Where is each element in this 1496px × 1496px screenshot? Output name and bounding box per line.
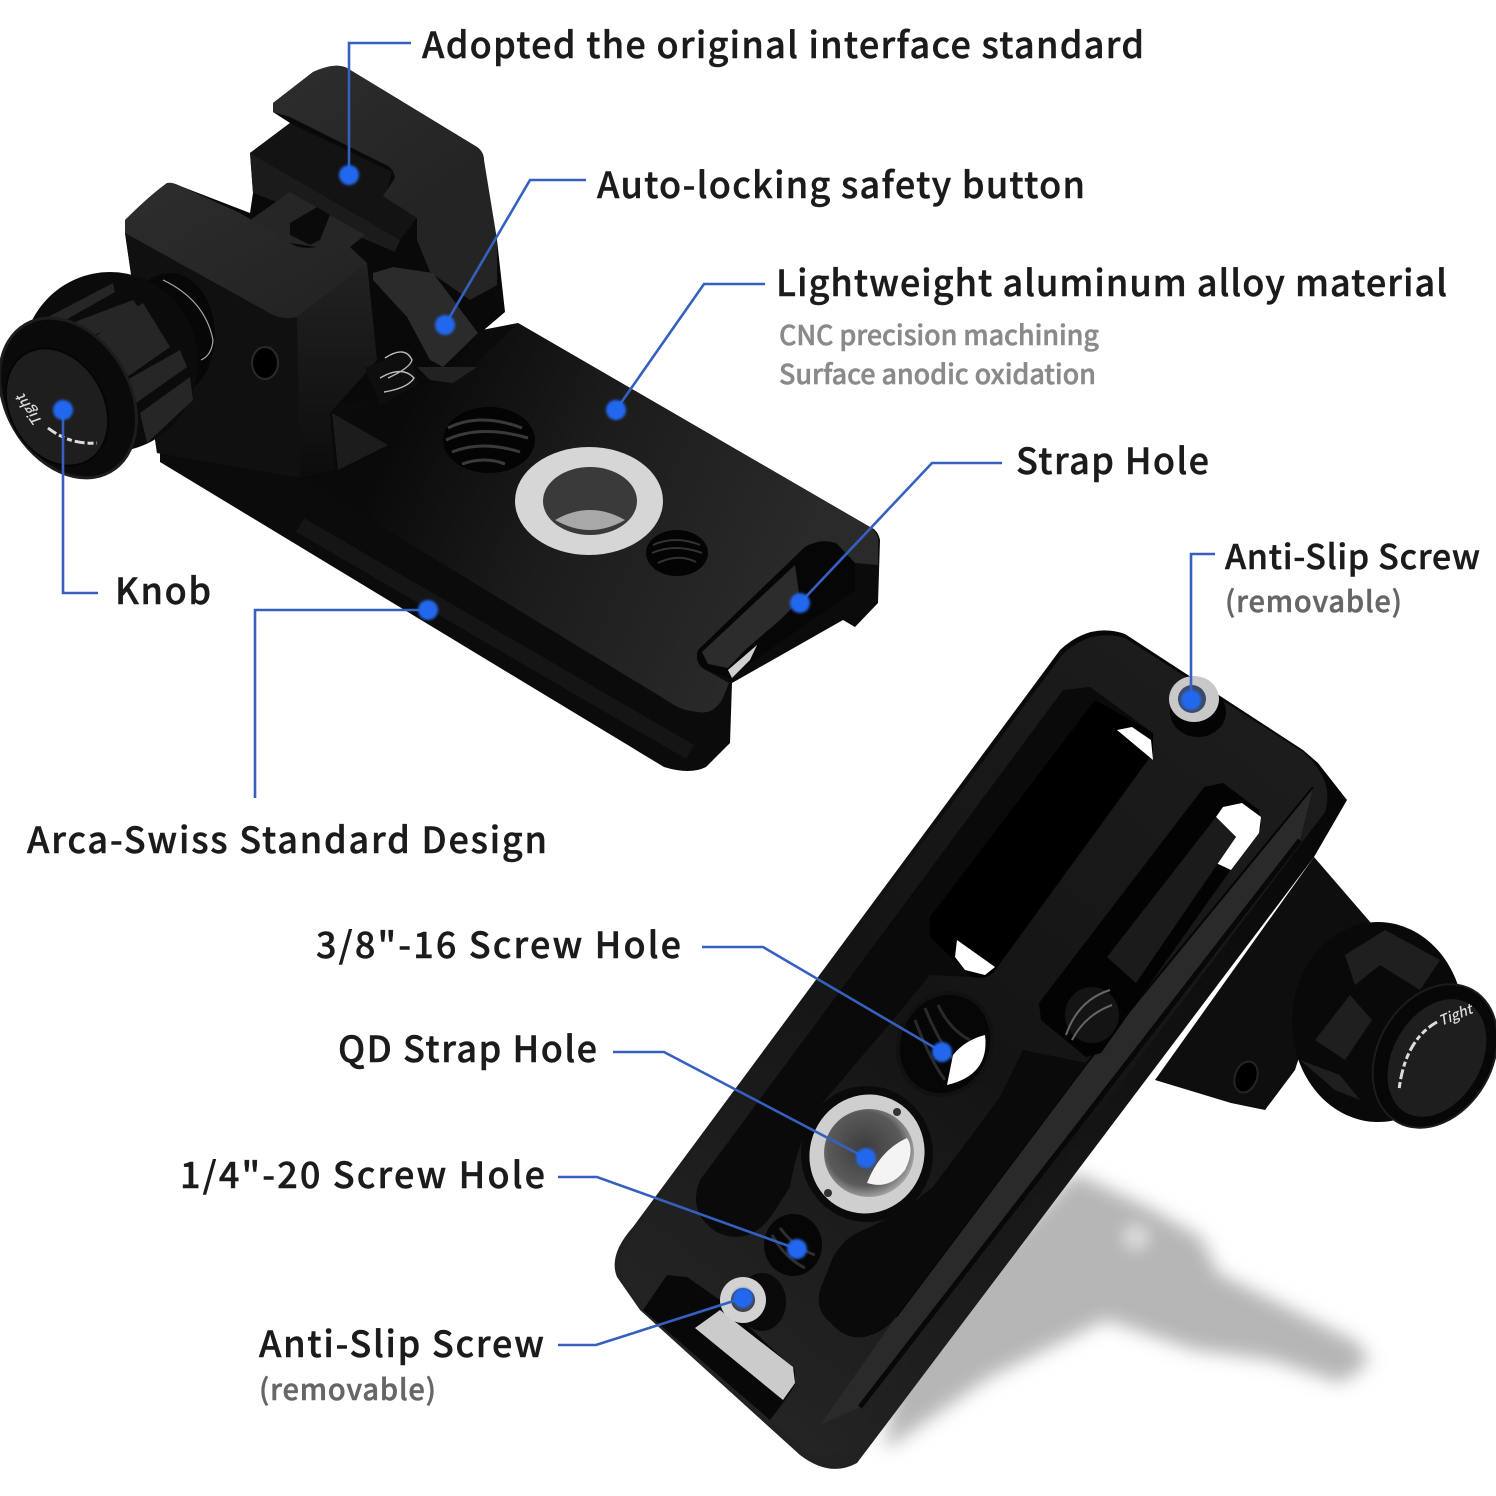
leader line	[702, 947, 942, 1052]
label: QD Strap Hole	[338, 1021, 597, 1073]
lock mechanism	[250, 192, 365, 247]
marker	[339, 165, 359, 185]
plate outer	[615, 630, 1347, 1469]
marker	[53, 400, 73, 420]
large through slot	[930, 700, 1153, 978]
wedge	[332, 413, 388, 470]
band dark line	[860, 840, 1300, 1407]
cutout bottom	[955, 940, 995, 975]
cap ring	[0, 293, 164, 503]
top product: quick release clamp plate	[0, 66, 880, 771]
knurled body	[1292, 922, 1464, 1122]
callout: interface standard	[339, 17, 1144, 185]
leader line	[445, 180, 586, 325]
marker	[435, 315, 455, 335]
label: Adopted the original interface standard	[422, 17, 1144, 69]
leader line	[558, 1177, 797, 1249]
bottom product: plate underside	[615, 630, 1496, 1469]
label: Strap Hole	[1016, 433, 1209, 485]
callout: anti-slip screw lower	[259, 1288, 753, 1409]
callout: strap hole	[790, 433, 1209, 613]
label: Anti-Slip Screw	[259, 1316, 544, 1368]
upper jaw top	[273, 66, 484, 218]
cap face	[1367, 981, 1496, 1135]
sub label: (removable)	[1225, 579, 1402, 621]
knob neck	[125, 273, 215, 397]
label: 1/4"-20 Screw Hole	[180, 1147, 545, 1199]
shelf front	[250, 153, 400, 252]
marker	[418, 600, 438, 620]
right slot cutout	[1216, 803, 1261, 870]
callout: aluminum alloy	[606, 255, 1447, 420]
anti-slip screw upper	[1169, 676, 1226, 737]
tight label: Tight	[1435, 998, 1478, 1031]
rear body	[1155, 857, 1371, 1110]
sub label 1: CNC precision machining	[779, 314, 1099, 353]
leader line	[63, 410, 98, 593]
leader line	[558, 1298, 743, 1345]
plate face	[620, 635, 1327, 1456]
callout: 1/4 screw hole	[180, 1147, 807, 1259]
shelf top	[250, 123, 417, 240]
label: Lightweight aluminum alloy material	[776, 255, 1447, 307]
mount hole	[1230, 1058, 1262, 1096]
cutout top	[1117, 727, 1153, 760]
cap ring	[1348, 962, 1496, 1150]
callout: arca-swiss	[27, 600, 547, 864]
label: Knob	[115, 563, 211, 615]
marker	[787, 1239, 807, 1259]
leader line	[349, 43, 411, 175]
side screw hole	[252, 347, 278, 379]
screw hole 1/4	[646, 530, 708, 576]
screw hole 3/8	[443, 407, 535, 473]
direction arrow	[48, 428, 97, 443]
marker	[1181, 690, 1201, 710]
sub label: (removable)	[259, 1367, 436, 1409]
label: Anti-Slip Screw	[1225, 530, 1480, 579]
leader line	[1191, 554, 1215, 700]
left front face	[125, 233, 300, 478]
marker	[932, 1042, 952, 1062]
inner screw	[1065, 987, 1119, 1043]
lower right recess	[819, 1050, 1087, 1337]
leader line	[800, 463, 1002, 603]
tight label: Tight	[10, 388, 47, 430]
1/4 screw hole	[764, 1214, 822, 1276]
knob	[0, 272, 215, 503]
knob	[1292, 922, 1496, 1150]
cap face	[0, 330, 129, 484]
knurl ridges	[48, 283, 193, 443]
leader line	[255, 610, 428, 798]
callout: 3/8 screw hole	[316, 917, 952, 1062]
strap slot	[697, 541, 855, 678]
label: Auto-locking safety button	[597, 157, 1085, 209]
label: 3/8"-16 Screw Hole	[316, 917, 681, 969]
inner block	[1107, 817, 1236, 983]
marker	[606, 400, 626, 420]
knurl ridges	[1300, 930, 1440, 1100]
3/8 screw hole	[881, 977, 1009, 1111]
callout: anti-slip screw upper	[1181, 530, 1480, 710]
callout: knob	[53, 400, 211, 615]
neck highlight	[163, 280, 213, 360]
callout: safety button	[435, 157, 1085, 335]
silver washer	[515, 447, 663, 555]
QD socket	[790, 1076, 944, 1232]
spring	[365, 350, 418, 405]
clamp silhouette	[125, 66, 505, 480]
label: Arca-Swiss Standard Design	[27, 812, 547, 864]
safety button	[373, 267, 478, 367]
direction arrow	[1399, 1022, 1437, 1090]
marker	[856, 1148, 876, 1168]
right front face	[293, 263, 377, 478]
strap notch	[643, 1275, 795, 1420]
callout: QD strap hole	[338, 1021, 876, 1168]
anti-slip screw lower	[720, 1273, 786, 1331]
step line	[896, 787, 1313, 1317]
under button piece	[417, 367, 477, 383]
marker	[790, 593, 810, 613]
plate body	[160, 323, 880, 771]
left jaw top	[125, 183, 367, 318]
lit edge band	[820, 787, 1313, 1425]
sub label 2: Surface anodic oxidation	[779, 353, 1096, 392]
strap silver insert	[695, 1310, 795, 1400]
knurled body	[22, 272, 198, 452]
leader line	[616, 284, 765, 410]
right block side face	[417, 160, 497, 300]
marker	[733, 1288, 753, 1308]
plate top face	[300, 323, 878, 712]
left recess	[696, 687, 1153, 1237]
slider	[290, 207, 330, 245]
shadow under bottom product	[885, 1173, 1369, 1450]
right slot	[1039, 783, 1261, 1057]
leader line	[613, 1052, 866, 1158]
plate side band	[300, 525, 690, 752]
